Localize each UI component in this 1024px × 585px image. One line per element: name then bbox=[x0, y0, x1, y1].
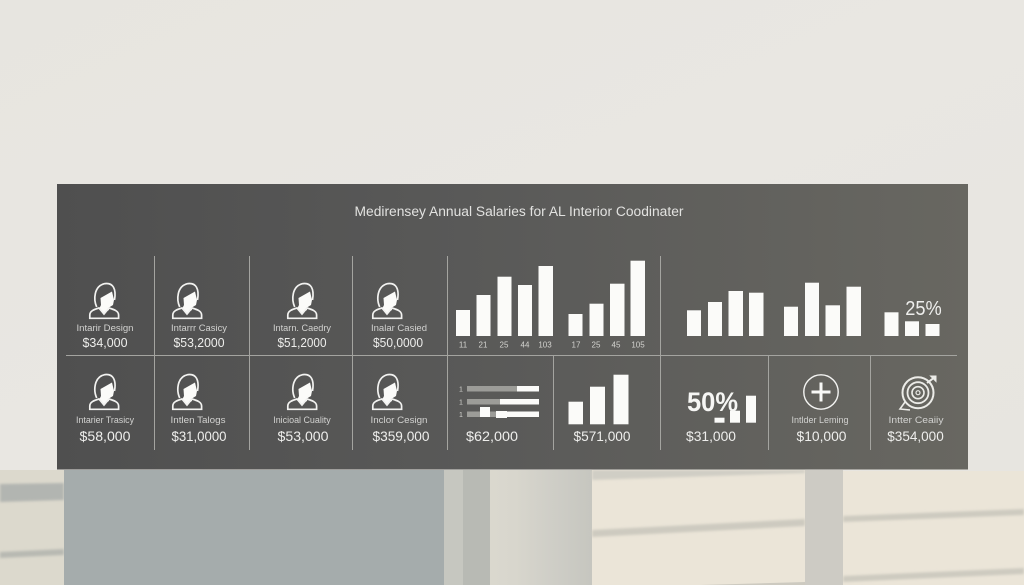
bar chart: group 2 axis labels: 45 bbox=[612, 340, 621, 350]
icon: circled plus bbox=[804, 375, 838, 409]
cell: row 1 person 1 bbox=[76, 283, 134, 350]
cell: quality bbox=[887, 415, 944, 444]
bar chart: three rising bars bbox=[568, 375, 628, 424]
cell: row 2 person 2: Intlen Talogs bbox=[170, 415, 226, 425]
icon: person bbox=[288, 283, 317, 318]
cell: learning bbox=[792, 415, 848, 444]
bar chart: group 1 bbox=[456, 266, 553, 336]
cell: row 2 person 3: $53,000 bbox=[278, 428, 329, 444]
grid dividers bbox=[66, 256, 957, 450]
bar chart: group 2 axis labels: 105 bbox=[631, 340, 645, 350]
cell: row 1 person 3 bbox=[273, 283, 332, 350]
bar chart: group 1 axis labels bbox=[459, 340, 552, 350]
bar chart: group 1 axis labels: 25 bbox=[500, 340, 509, 350]
chart: 50% with bars: 50% bbox=[687, 387, 738, 417]
cell: row 1 person 4: $50,0000 bbox=[373, 335, 423, 350]
cell: row 2 person 1: Intarier Trasicy bbox=[76, 415, 134, 425]
cell: row 1 person 2: Intarrr Casicy bbox=[171, 323, 228, 333]
icon: target with arrow bbox=[900, 376, 936, 410]
bar chart: group 1 axis labels: 11 bbox=[459, 340, 468, 350]
bar chart: group 3 bbox=[687, 291, 764, 336]
cell: row 1 person 2 bbox=[171, 283, 228, 350]
icon: person bbox=[288, 374, 317, 409]
bar chart: group 2 axis labels: 25 bbox=[592, 340, 601, 350]
panel: salaries board bbox=[57, 184, 968, 470]
cell: learning: $10,000 bbox=[796, 428, 847, 444]
bar chart: group 2 axis labels: 17 bbox=[572, 340, 581, 350]
cell: row 1 person 3: Intarn. Caedry bbox=[273, 323, 332, 333]
cell: row 2 person 3 bbox=[273, 374, 331, 444]
cell: row 1 person 3: $51,2000 bbox=[278, 335, 326, 350]
bar chart: group 5 with 25% bbox=[884, 298, 942, 336]
chart: 50% with bars bbox=[687, 387, 756, 423]
chart: horizontal progress bars: 1 bbox=[459, 400, 463, 406]
cell: row 2 person 4 bbox=[370, 374, 430, 444]
window light on lower wall bbox=[0, 470, 1024, 585]
icon: person bbox=[90, 374, 119, 409]
title: Medirensey Annual Salaries for AL Interior Coodinater bbox=[354, 204, 684, 219]
amount: $62,000: $62,000 bbox=[466, 428, 518, 444]
chart: horizontal progress bars: 1 bbox=[459, 386, 463, 394]
cell: quality: Intter Ceaiiy bbox=[888, 415, 944, 425]
bar chart: group 2 bbox=[568, 261, 645, 336]
bar chart: group 1 axis labels: 103 bbox=[538, 340, 552, 350]
bar chart: group 4 bbox=[784, 283, 861, 336]
bar chart: group 1 axis labels: 21 bbox=[479, 340, 488, 350]
icon: person bbox=[373, 374, 402, 409]
cell: row 1 person 2: $53,2000 bbox=[174, 335, 224, 350]
icon: person bbox=[173, 374, 202, 409]
icon: person bbox=[373, 283, 402, 318]
cell: row 2 person 1: $58,000 bbox=[80, 428, 131, 444]
icon: person bbox=[90, 283, 119, 318]
icon: person bbox=[173, 283, 202, 318]
cell: row 2 person 3: Inicioal Cuality bbox=[273, 415, 331, 425]
amount: $571,000: $571,000 bbox=[574, 428, 631, 444]
bar chart: group 2 axis labels bbox=[572, 340, 645, 350]
cell: quality: $354,000 bbox=[887, 428, 944, 444]
cell: row 1 person 1: $34,000 bbox=[82, 335, 128, 350]
cell: row 2 person 4: $359,000 bbox=[372, 428, 430, 444]
amount: $31,000: $31,000 bbox=[686, 428, 736, 444]
cell: row 1 person 1: Intarir Design bbox=[76, 323, 134, 333]
chart: horizontal progress bars bbox=[459, 386, 539, 419]
cell: row 1 person 4 bbox=[371, 283, 427, 350]
bar chart: group 1 axis labels: 44 bbox=[521, 340, 530, 350]
cell: learning: Intlder Leming bbox=[792, 415, 848, 425]
cell: row 2 person 4: Inclor Cesign bbox=[370, 415, 428, 425]
cell: row 1 person 4: Inalar Casied bbox=[371, 323, 427, 333]
cell: row 2 person 2: $31,0000 bbox=[172, 428, 227, 444]
cell: row 2 person 2 bbox=[170, 374, 227, 444]
cell: row 2 person 1 bbox=[76, 374, 134, 444]
bar chart: group 5 with 25%: 25% bbox=[905, 298, 942, 320]
chart: horizontal progress bars: 1 bbox=[459, 412, 463, 419]
